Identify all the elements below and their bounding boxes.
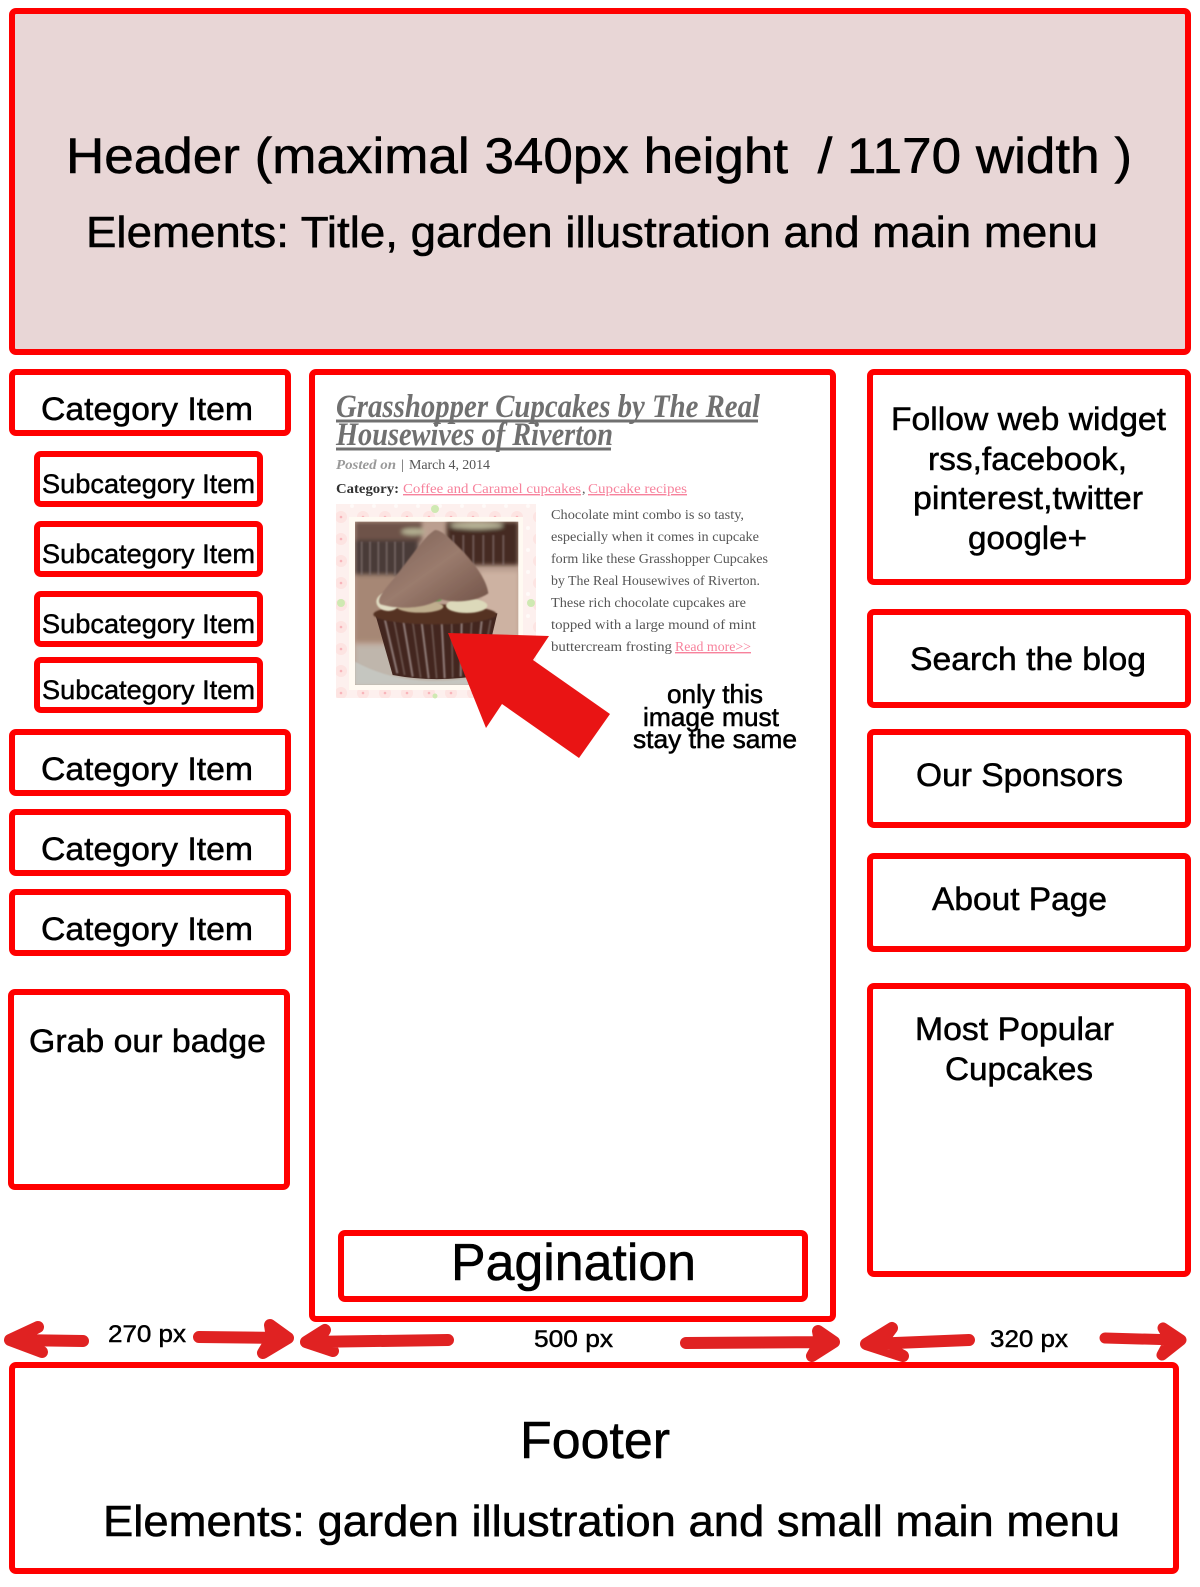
subcategory item 1: Subcategory Item (42, 469, 255, 499)
post categories: , (582, 482, 586, 497)
post meta: | (401, 458, 404, 473)
post excerpt: Read more>> (675, 640, 751, 655)
category item 1: Category Item (41, 391, 253, 427)
arrow: 320 left (866, 1328, 969, 1356)
post excerpt (551, 508, 768, 655)
post excerpt: These rich chocolate cupcakes are (551, 596, 746, 611)
cupcake photo (355, 522, 518, 685)
cupcake image with lace frame (336, 504, 536, 698)
arrow: 320 right (1105, 1328, 1181, 1355)
post excerpt: especially when it comes in cupcake (551, 530, 759, 545)
post title: Housewives of Riverton (335, 417, 613, 453)
subcategory item 3: Subcategory Item (42, 609, 255, 639)
grab our badge panel (11, 992, 287, 1187)
footer panel (12, 1365, 1176, 1571)
chocolate dome (379, 530, 488, 608)
big red arrow pointing to image (448, 633, 610, 758)
post meta: Posted on (336, 458, 396, 473)
right sidebar (870, 372, 1188, 1274)
our sponsors (870, 732, 1188, 825)
footer title: Footer (520, 1412, 670, 1470)
image annotation: stay the same (633, 724, 797, 754)
main content panel (312, 372, 833, 1319)
post categories (336, 482, 687, 497)
header elements text: Elements: Title, garden illustration and main menu (86, 208, 1098, 257)
image annotation: only this (667, 679, 763, 709)
lace frame (336, 504, 536, 698)
post categories: Coffee and Caramel cupcakes (403, 482, 581, 497)
category item 1 (12, 372, 288, 433)
arrow: 500 left (306, 1330, 448, 1351)
label: 270 px: 270 px (108, 1321, 186, 1348)
category item 4: Category Item (41, 911, 253, 947)
post excerpt: Chocolate mint combo is so tasty, (551, 508, 744, 523)
subcategory item 3 (37, 594, 260, 644)
category item 2: Category Item (41, 751, 253, 787)
post title: Grasshopper Cupcakes by The Real (336, 389, 761, 425)
follow widget (870, 372, 1188, 582)
our sponsors: Our Sponsors (916, 757, 1123, 793)
category item 4 (12, 892, 288, 953)
post excerpt: buttercream frosting (551, 640, 672, 655)
follow widget: google+ (968, 520, 1087, 556)
post excerpt: by The Real Housewives of Riverton. (551, 574, 760, 589)
post excerpt: topped with a large mound of mint (551, 618, 756, 633)
category item 2 (12, 732, 288, 793)
subcategory item 1 (37, 454, 260, 504)
cream (376, 592, 487, 613)
arrow: 500 right (686, 1331, 834, 1356)
post title (335, 389, 761, 453)
most popular cupcakes: Cupcakes (945, 1051, 1093, 1087)
pagination: Pagination (451, 1234, 696, 1292)
arrow: 270 right (199, 1325, 288, 1353)
subcategory item 4: Subcategory Item (42, 675, 255, 705)
header panel (12, 11, 1188, 352)
post meta (336, 458, 490, 473)
post categories: Category: (336, 482, 399, 497)
subcategory item 4 (37, 660, 260, 710)
grab our badge panel: Grab our badge (29, 1023, 266, 1059)
image annotation (633, 679, 797, 754)
label: 320 px: 320 px (990, 1326, 1068, 1353)
pagination (341, 1233, 805, 1299)
post excerpt: form like these Grasshopper Cupcakes (551, 552, 768, 567)
search the blog: Search the blog (910, 641, 1146, 677)
post categories: Cupcake recipes (588, 482, 687, 497)
arrow: 270 left (10, 1327, 83, 1352)
subcategory item 2 (37, 524, 260, 574)
subcategory item 2: Subcategory Item (42, 539, 255, 569)
follow widget: Follow web widget (891, 401, 1166, 437)
header title: Header (maximal 340px height / 1170 width ) (66, 128, 1132, 184)
label: 500 px: 500 px (534, 1326, 613, 1353)
most popular cupcakes (870, 986, 1188, 1274)
post meta: March 4, 2014 (409, 458, 490, 473)
follow widget: pinterest,twitter (913, 480, 1143, 516)
cake rim (373, 604, 497, 624)
wrapper (375, 613, 497, 679)
most popular cupcakes: Most Popular (915, 1011, 1114, 1047)
category item 3 (12, 812, 288, 873)
about page (870, 856, 1188, 949)
footer elements text: Elements: garden illustration and small main menu (103, 1497, 1120, 1546)
about page: About Page (932, 881, 1107, 917)
category item 3: Category Item (41, 831, 253, 867)
image annotation: image must (643, 702, 780, 732)
follow widget: rss,facebook, (928, 441, 1127, 477)
search the blog (870, 612, 1188, 705)
width annotations (10, 1321, 1181, 1356)
left sidebar (11, 372, 288, 1187)
